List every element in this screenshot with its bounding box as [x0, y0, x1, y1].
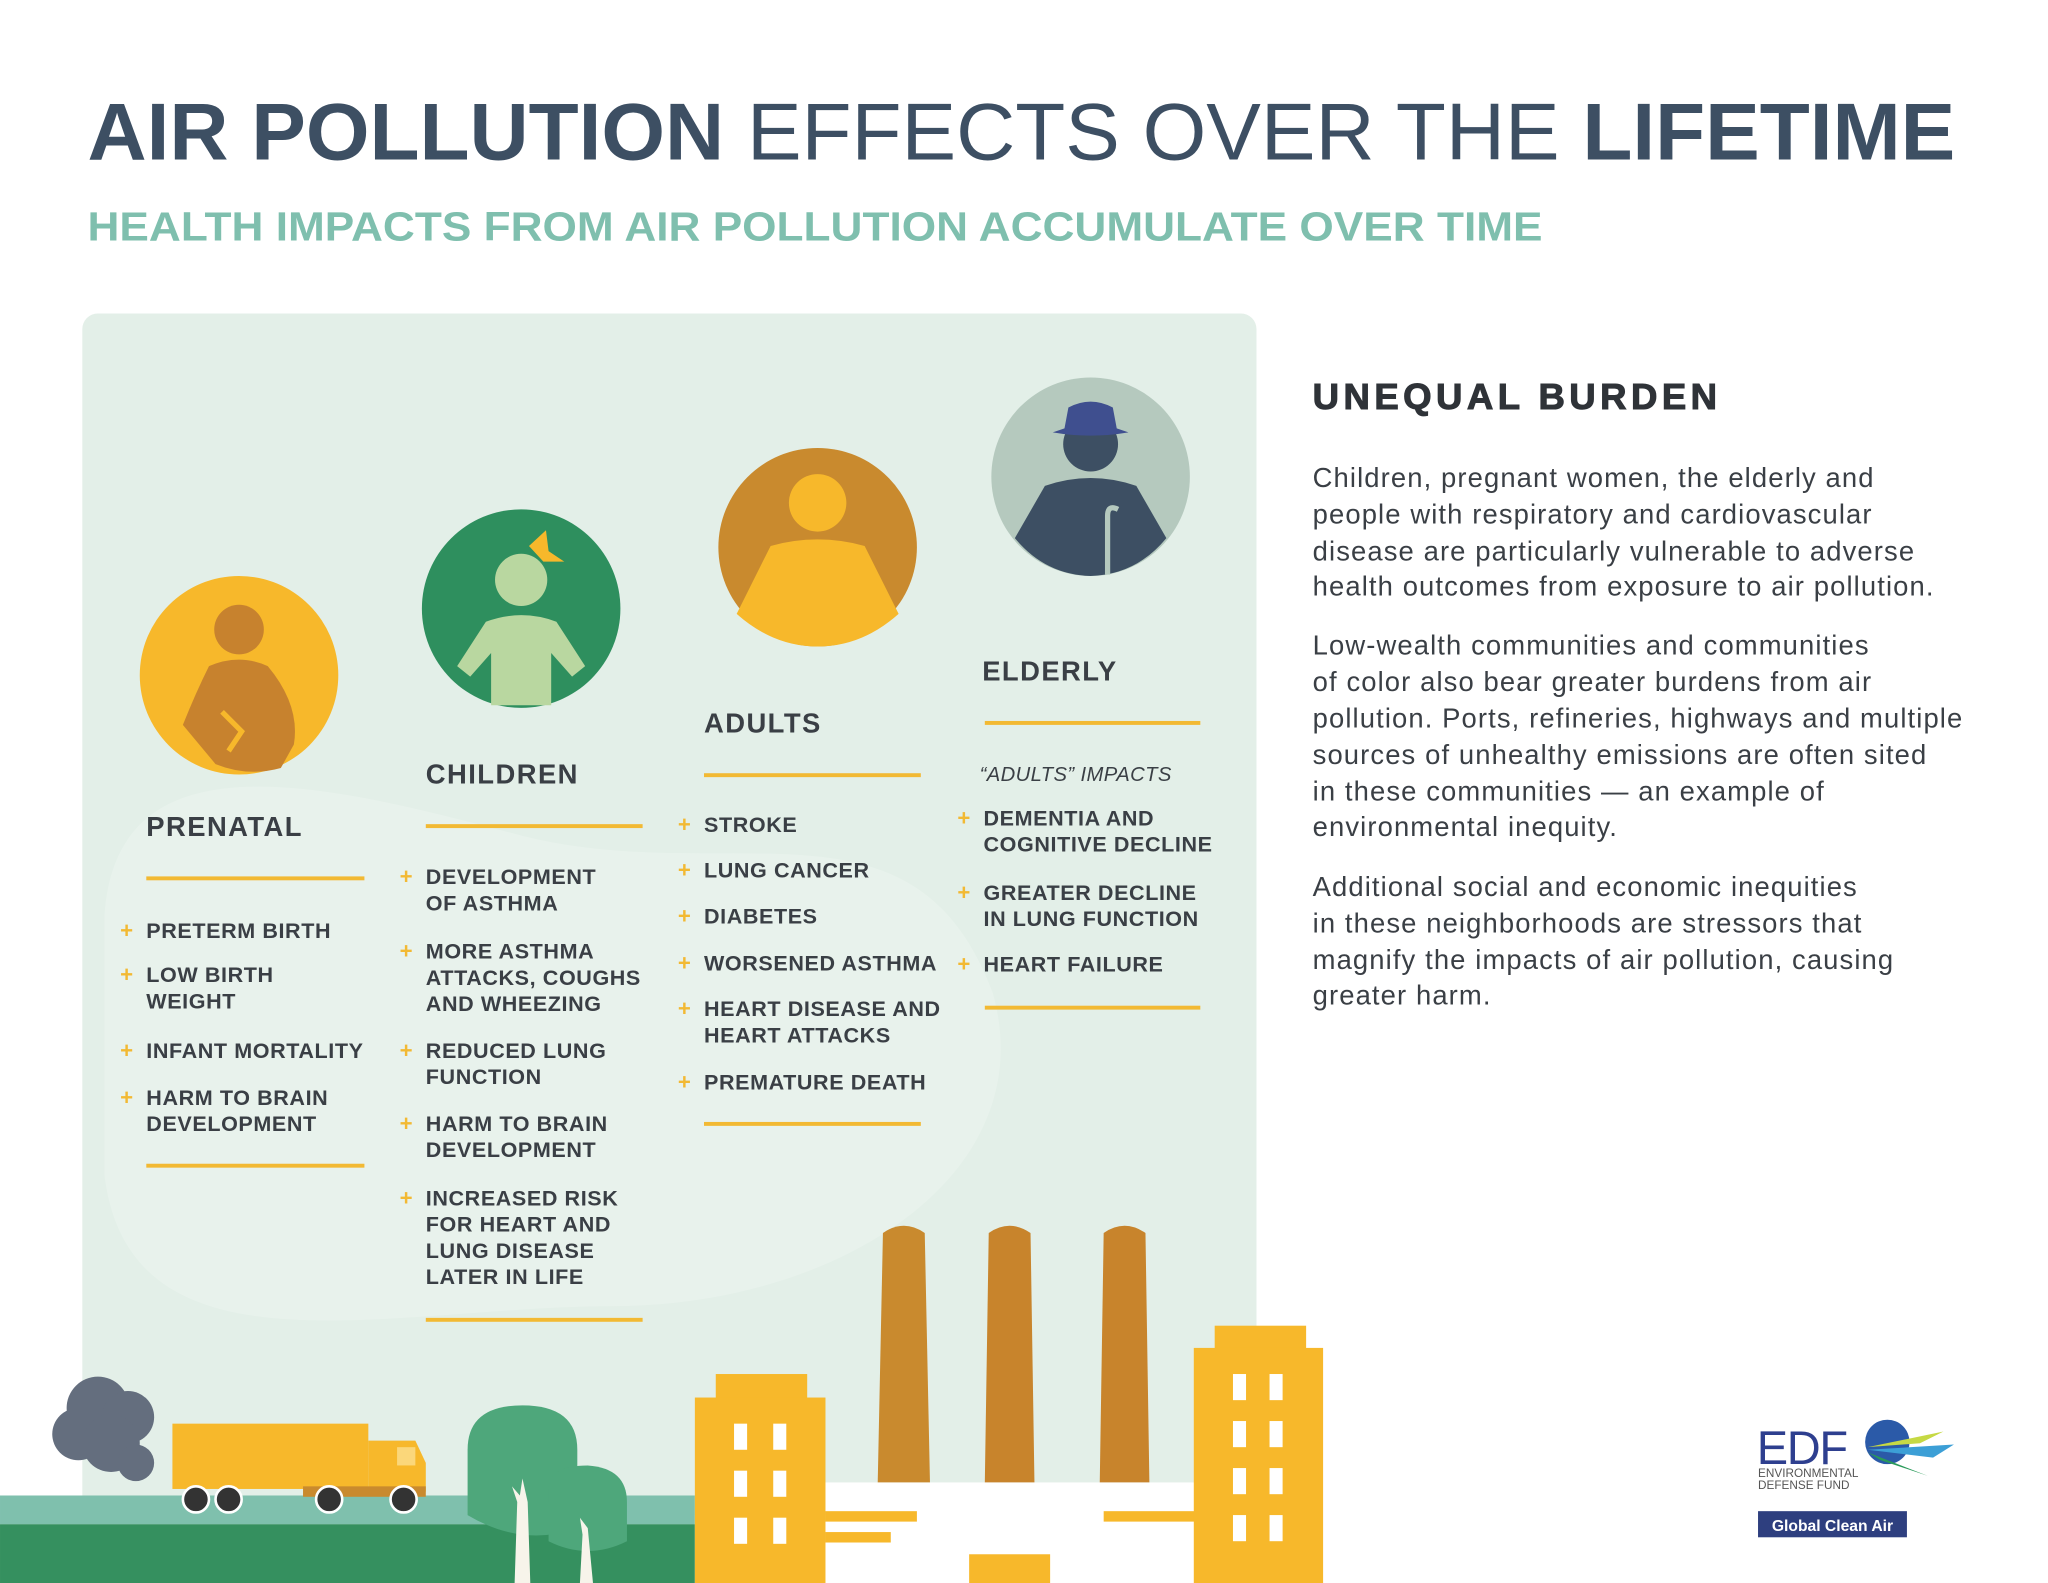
ground — [0, 1495, 695, 1583]
column: children: DEVELOPMENT — [426, 864, 596, 889]
column: elderly: “ADULTS” IMPACTS — [980, 764, 1172, 786]
heading: unequal burden: UNEQUAL BURDEN — [1313, 376, 1722, 417]
column: elderly: + — [957, 805, 970, 830]
column: children: MORE ASTHMA — [426, 939, 594, 964]
column: children: + — [400, 1186, 413, 1211]
text block: unequal burden — [1313, 462, 1963, 1010]
column: children: AND WHEEZING — [426, 991, 602, 1016]
column: adults: PREMATURE DEATH — [704, 1069, 926, 1094]
text block: unequal burden: sources of unhealthy emissions are often sited — [1313, 739, 1927, 770]
column: adults: + — [678, 1069, 691, 1094]
icon: smoke cloud — [52, 1377, 154, 1481]
text block: unequal burden: Additional social and economic inequities — [1313, 871, 1858, 902]
icon: trees — [468, 1405, 627, 1583]
column: prenatal: PRETERM BIRTH — [146, 918, 331, 943]
column: adults: LUNG CANCER — [704, 858, 870, 883]
column: prenatal: WEIGHT — [146, 988, 236, 1013]
column: prenatal: + — [120, 918, 133, 943]
column: elderly: DEMENTIA AND — [984, 805, 1154, 830]
column: elderly: ELDERLY — [982, 655, 1118, 686]
column: prenatal: INFANT MORTALITY — [146, 1038, 364, 1063]
column: prenatal: + — [120, 962, 133, 987]
column: children: LUNG DISEASE — [426, 1238, 594, 1263]
column: elderly: + — [957, 952, 970, 977]
text block: unequal burden: of color also bear greater burdens from air — [1313, 666, 1872, 697]
logo: EDF: DEFENSE FUND — [1758, 1479, 1849, 1492]
column: elderly: IN LUNG FUNCTION — [984, 906, 1199, 931]
column: prenatal — [120, 811, 364, 1168]
column: prenatal: DEVELOPMENT — [146, 1111, 317, 1136]
logo: EDF — [1757, 1420, 1954, 1537]
column: children: OF ASTHMA — [426, 890, 558, 915]
icon: elderly — [991, 377, 1190, 576]
text block: unequal burden: pollution. Ports, refineries, highways and multiple — [1313, 703, 1963, 734]
column: children: DEVELOPMENT — [426, 1137, 596, 1162]
panel: life stages — [82, 313, 1256, 1515]
column: elderly: + — [957, 880, 970, 905]
subtitle: HEALTH IMPACTS FROM AIR POLLUTION ACCUMULATE OVER TIME — [88, 203, 1543, 249]
column: children: + — [400, 1038, 413, 1063]
text block: unequal burden: health outcomes from exposure to air pollution. — [1313, 571, 1935, 602]
column: children: + — [400, 1111, 413, 1136]
column: children: INCREASED RISK — [426, 1186, 618, 1211]
column: adults: + — [678, 950, 691, 975]
icon: prenatal — [140, 576, 338, 775]
logo: EDF: ENVIRONMENTAL — [1758, 1467, 1859, 1480]
text block: unequal burden: Children, pregnant women, the elderly and — [1313, 462, 1875, 493]
column: children: CHILDREN — [426, 759, 579, 790]
column: children: FUNCTION — [426, 1064, 542, 1089]
column: adults: + — [678, 996, 691, 1021]
text block: unequal burden: disease are particularly vulnerable to adverse — [1313, 535, 1915, 566]
text block: unequal burden: people with respiratory and cardiovascular — [1313, 499, 1873, 530]
column: adults: WORSENED ASTHMA — [704, 950, 937, 975]
text block: unequal burden: magnify the impacts of air pollution, causing — [1313, 944, 1894, 975]
column: children: REDUCED LUNG — [426, 1038, 606, 1063]
text block: unequal burden: in these neighborhoods are stressors that — [1313, 908, 1862, 939]
text block: unequal burden: greater harm. — [1313, 979, 1492, 1010]
column: adults — [678, 708, 941, 1126]
column: children: + — [400, 864, 413, 889]
column: adults: ADULTS — [704, 708, 822, 739]
icon: child — [422, 509, 620, 708]
column: adults: HEART DISEASE AND — [704, 996, 941, 1021]
column: elderly — [957, 655, 1213, 1010]
column: prenatal: HARM TO BRAIN — [146, 1085, 328, 1110]
column: children: LATER IN LIFE — [426, 1264, 584, 1289]
logo: EDF: EDF — [1757, 1421, 1847, 1474]
column: adults: STROKE — [704, 812, 797, 837]
column: children: FOR HEART AND — [426, 1212, 611, 1237]
column: elderly: GREATER DECLINE — [984, 880, 1197, 905]
column: prenatal: + — [120, 1038, 133, 1063]
column: elderly: HEART FAILURE — [984, 952, 1164, 977]
column: children — [400, 759, 643, 1322]
icon: truck — [172, 1424, 426, 1512]
column: prenatal: LOW BIRTH — [146, 962, 274, 987]
text block: unequal burden: environmental inequity. — [1313, 811, 1618, 842]
column: elderly: COGNITIVE DECLINE — [984, 832, 1213, 857]
text block: unequal burden: in these communities — an example of — [1313, 776, 1825, 807]
logo: EDF: Global Clean Air — [1772, 1518, 1893, 1535]
buildings — [695, 1326, 1323, 1583]
title: AIR POLLUTION EFFECTS OVER THE LIFETIME — [88, 87, 1955, 177]
factory — [825, 1226, 1195, 1583]
icon: adult — [718, 448, 917, 647]
column: adults: DIABETES — [704, 903, 818, 928]
column: prenatal: + — [120, 1085, 133, 1110]
column: adults: + — [678, 903, 691, 928]
column: children: HARM TO BRAIN — [426, 1111, 608, 1136]
column: prenatal: PRENATAL — [146, 811, 303, 842]
column: adults: + — [678, 812, 691, 837]
column: children: + — [400, 939, 413, 964]
text block: unequal burden: Low-wealth communities and communities — [1313, 629, 1870, 660]
column: adults: + — [678, 858, 691, 883]
column: adults: HEART ATTACKS — [704, 1022, 891, 1047]
column: children: ATTACKS, COUGHS — [426, 965, 641, 990]
